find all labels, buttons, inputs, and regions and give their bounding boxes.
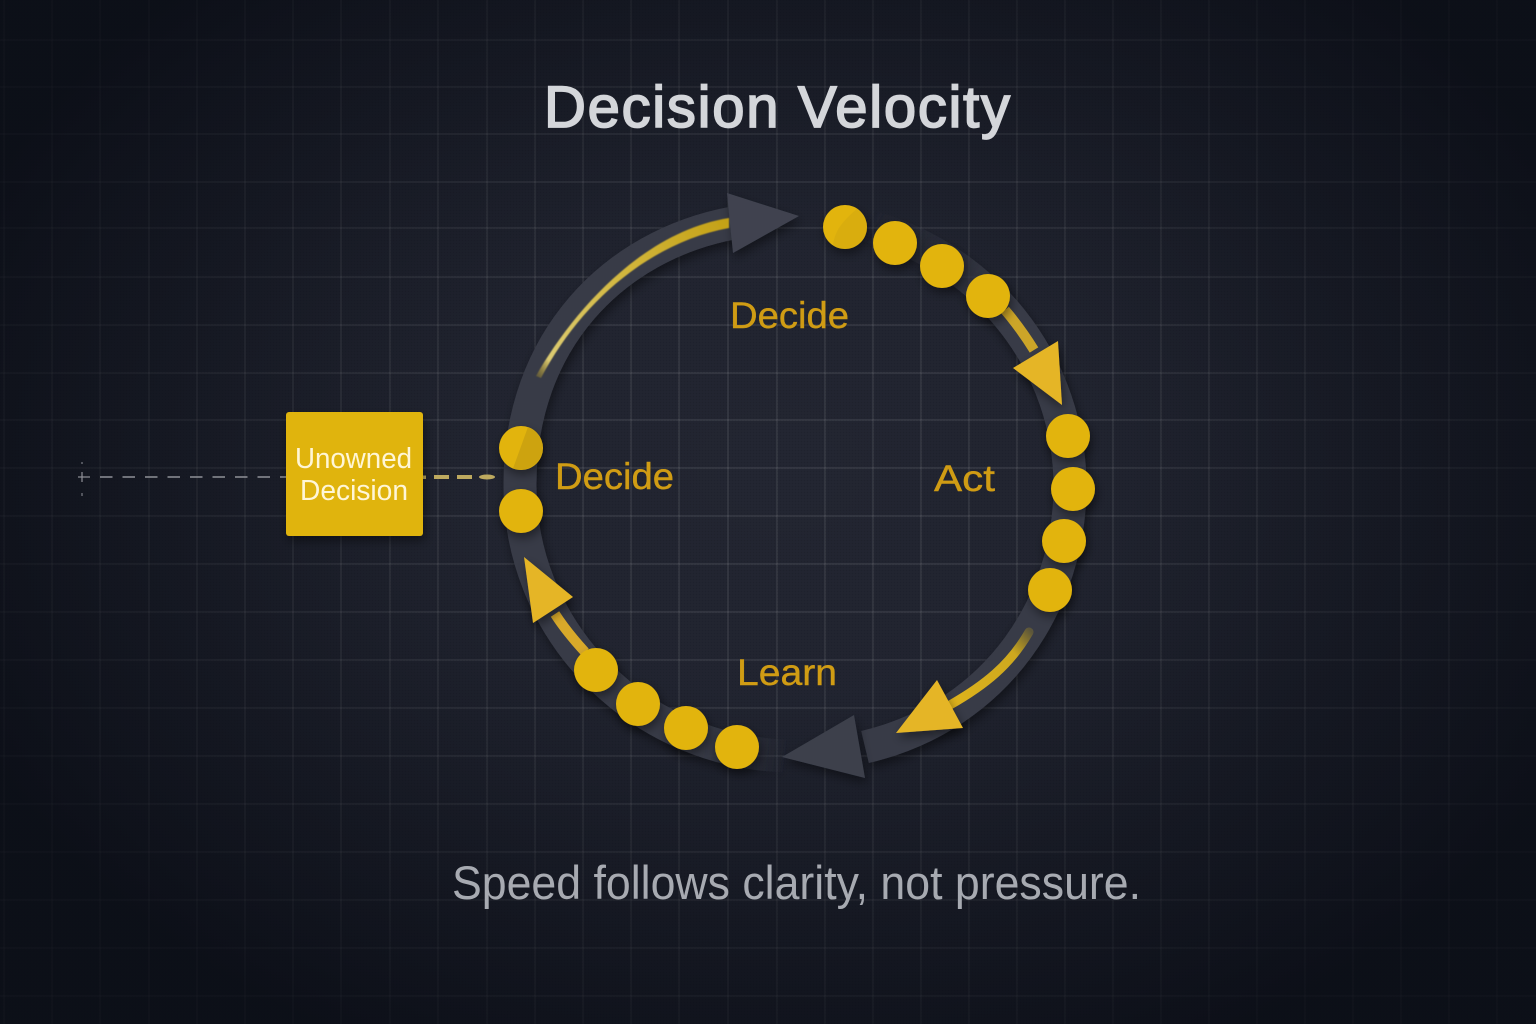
label: Learn: Learn	[737, 652, 837, 693]
ring: left side arc	[520, 223, 788, 756]
dots: bottom group	[574, 648, 759, 769]
label: Decide top: Decide	[730, 295, 849, 336]
label: Decide left: Decide	[555, 456, 674, 497]
ring: right side arc	[860, 224, 1070, 747]
arrow: yellow head lower left	[524, 557, 573, 623]
box: Unowned Decision: Decision	[300, 475, 408, 507]
title: Decision Velocity	[544, 75, 1010, 140]
dot facet: top dot	[833, 208, 867, 249]
dots: left group	[499, 426, 543, 533]
strip: yellow lower right	[950, 632, 1029, 705]
dot facet: left dot	[513, 427, 543, 470]
strip: yellow lower left	[555, 614, 585, 652]
strip: yellow top-left	[536, 218, 729, 378]
dashed connector: box to ring	[423, 474, 495, 480]
strip: yellow upper right	[1005, 310, 1034, 350]
box: Unowned Decision: Unowned	[295, 443, 412, 475]
dots: top right group	[823, 205, 1010, 318]
caption: Speed follows clarity, not pressure.	[452, 856, 1141, 909]
cycle diagram	[423, 193, 1095, 778]
dashed line: incoming from left	[78, 462, 286, 496]
label: Act: Act	[934, 458, 996, 499]
box: Unowned Decision	[286, 412, 423, 536]
arrow: yellow head lower right	[896, 680, 963, 733]
arrow: gray head bottom	[782, 715, 865, 778]
arrow: gray head top	[727, 193, 799, 253]
dots: right group	[1028, 414, 1095, 612]
arrow: yellow head upper right	[1013, 341, 1062, 405]
